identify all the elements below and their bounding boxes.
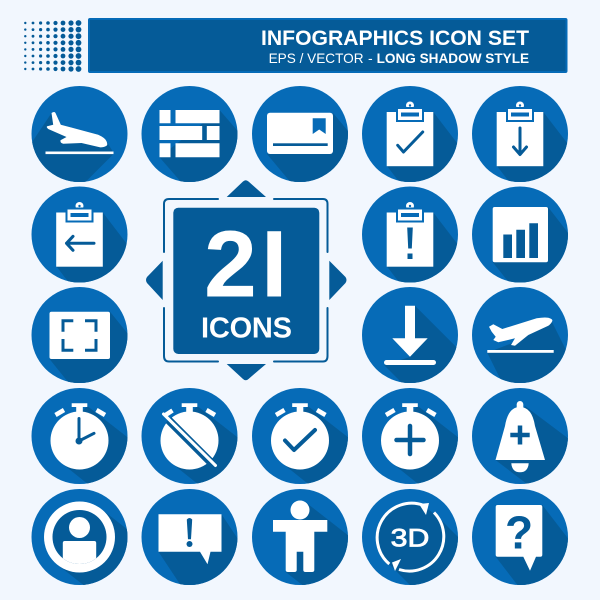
center badge: 21 icons: [146, 180, 346, 380]
number: I: [261, 212, 287, 318]
subtitle: EPS / VECTOR: [269, 50, 364, 66]
halftone dot pattern: [24, 20, 81, 72]
number: 2: [204, 212, 257, 318]
icon: clipboard with down arrow: [472, 86, 568, 182]
icon: clipboard with left arrow: [32, 186, 128, 282]
icon: brick wall: [142, 86, 238, 182]
icon: card with bookmark: [252, 86, 348, 182]
icon: 3D rotation: 3D: [391, 524, 429, 552]
icon: fullscreen frame: [32, 287, 128, 383]
badge panel: [173, 208, 319, 354]
icon: bell with plus: [472, 388, 568, 484]
icon: clipboard with check: [362, 86, 458, 182]
badge triangles: [146, 180, 346, 380]
subtitle: [269, 50, 529, 66]
subtitle: -: [368, 50, 373, 66]
icon: 3D rotation: [362, 489, 458, 585]
icon: speech bubble with question mark: ?: [505, 506, 533, 558]
header banner: [89, 19, 566, 72]
badge label: ICONS: [201, 312, 292, 344]
icon: user profile ring: [32, 489, 128, 585]
badge frame: [164, 199, 328, 362]
icon: stopwatch with plus: [362, 388, 458, 484]
icon: stopwatch with clock hands: [32, 388, 128, 484]
icon: plane taking off: [472, 287, 568, 383]
icon: standing person: [252, 489, 348, 585]
icon: plane landing: [32, 86, 128, 182]
icon: stopwatch with check: [252, 388, 348, 484]
subtitle: LONG SHADOW STYLE: [377, 50, 529, 66]
icon: stopwatch crossed out: [142, 388, 238, 484]
icon: clipboard with exclamation: [362, 186, 458, 282]
icon: bar chart: [472, 186, 568, 282]
icon: download arrow: [362, 287, 458, 383]
icon: speech bubble with question mark: [472, 489, 568, 585]
icon: speech bubble with exclamation: [142, 489, 238, 585]
title: INFOGRAPHICS ICON SET: [261, 27, 529, 50]
